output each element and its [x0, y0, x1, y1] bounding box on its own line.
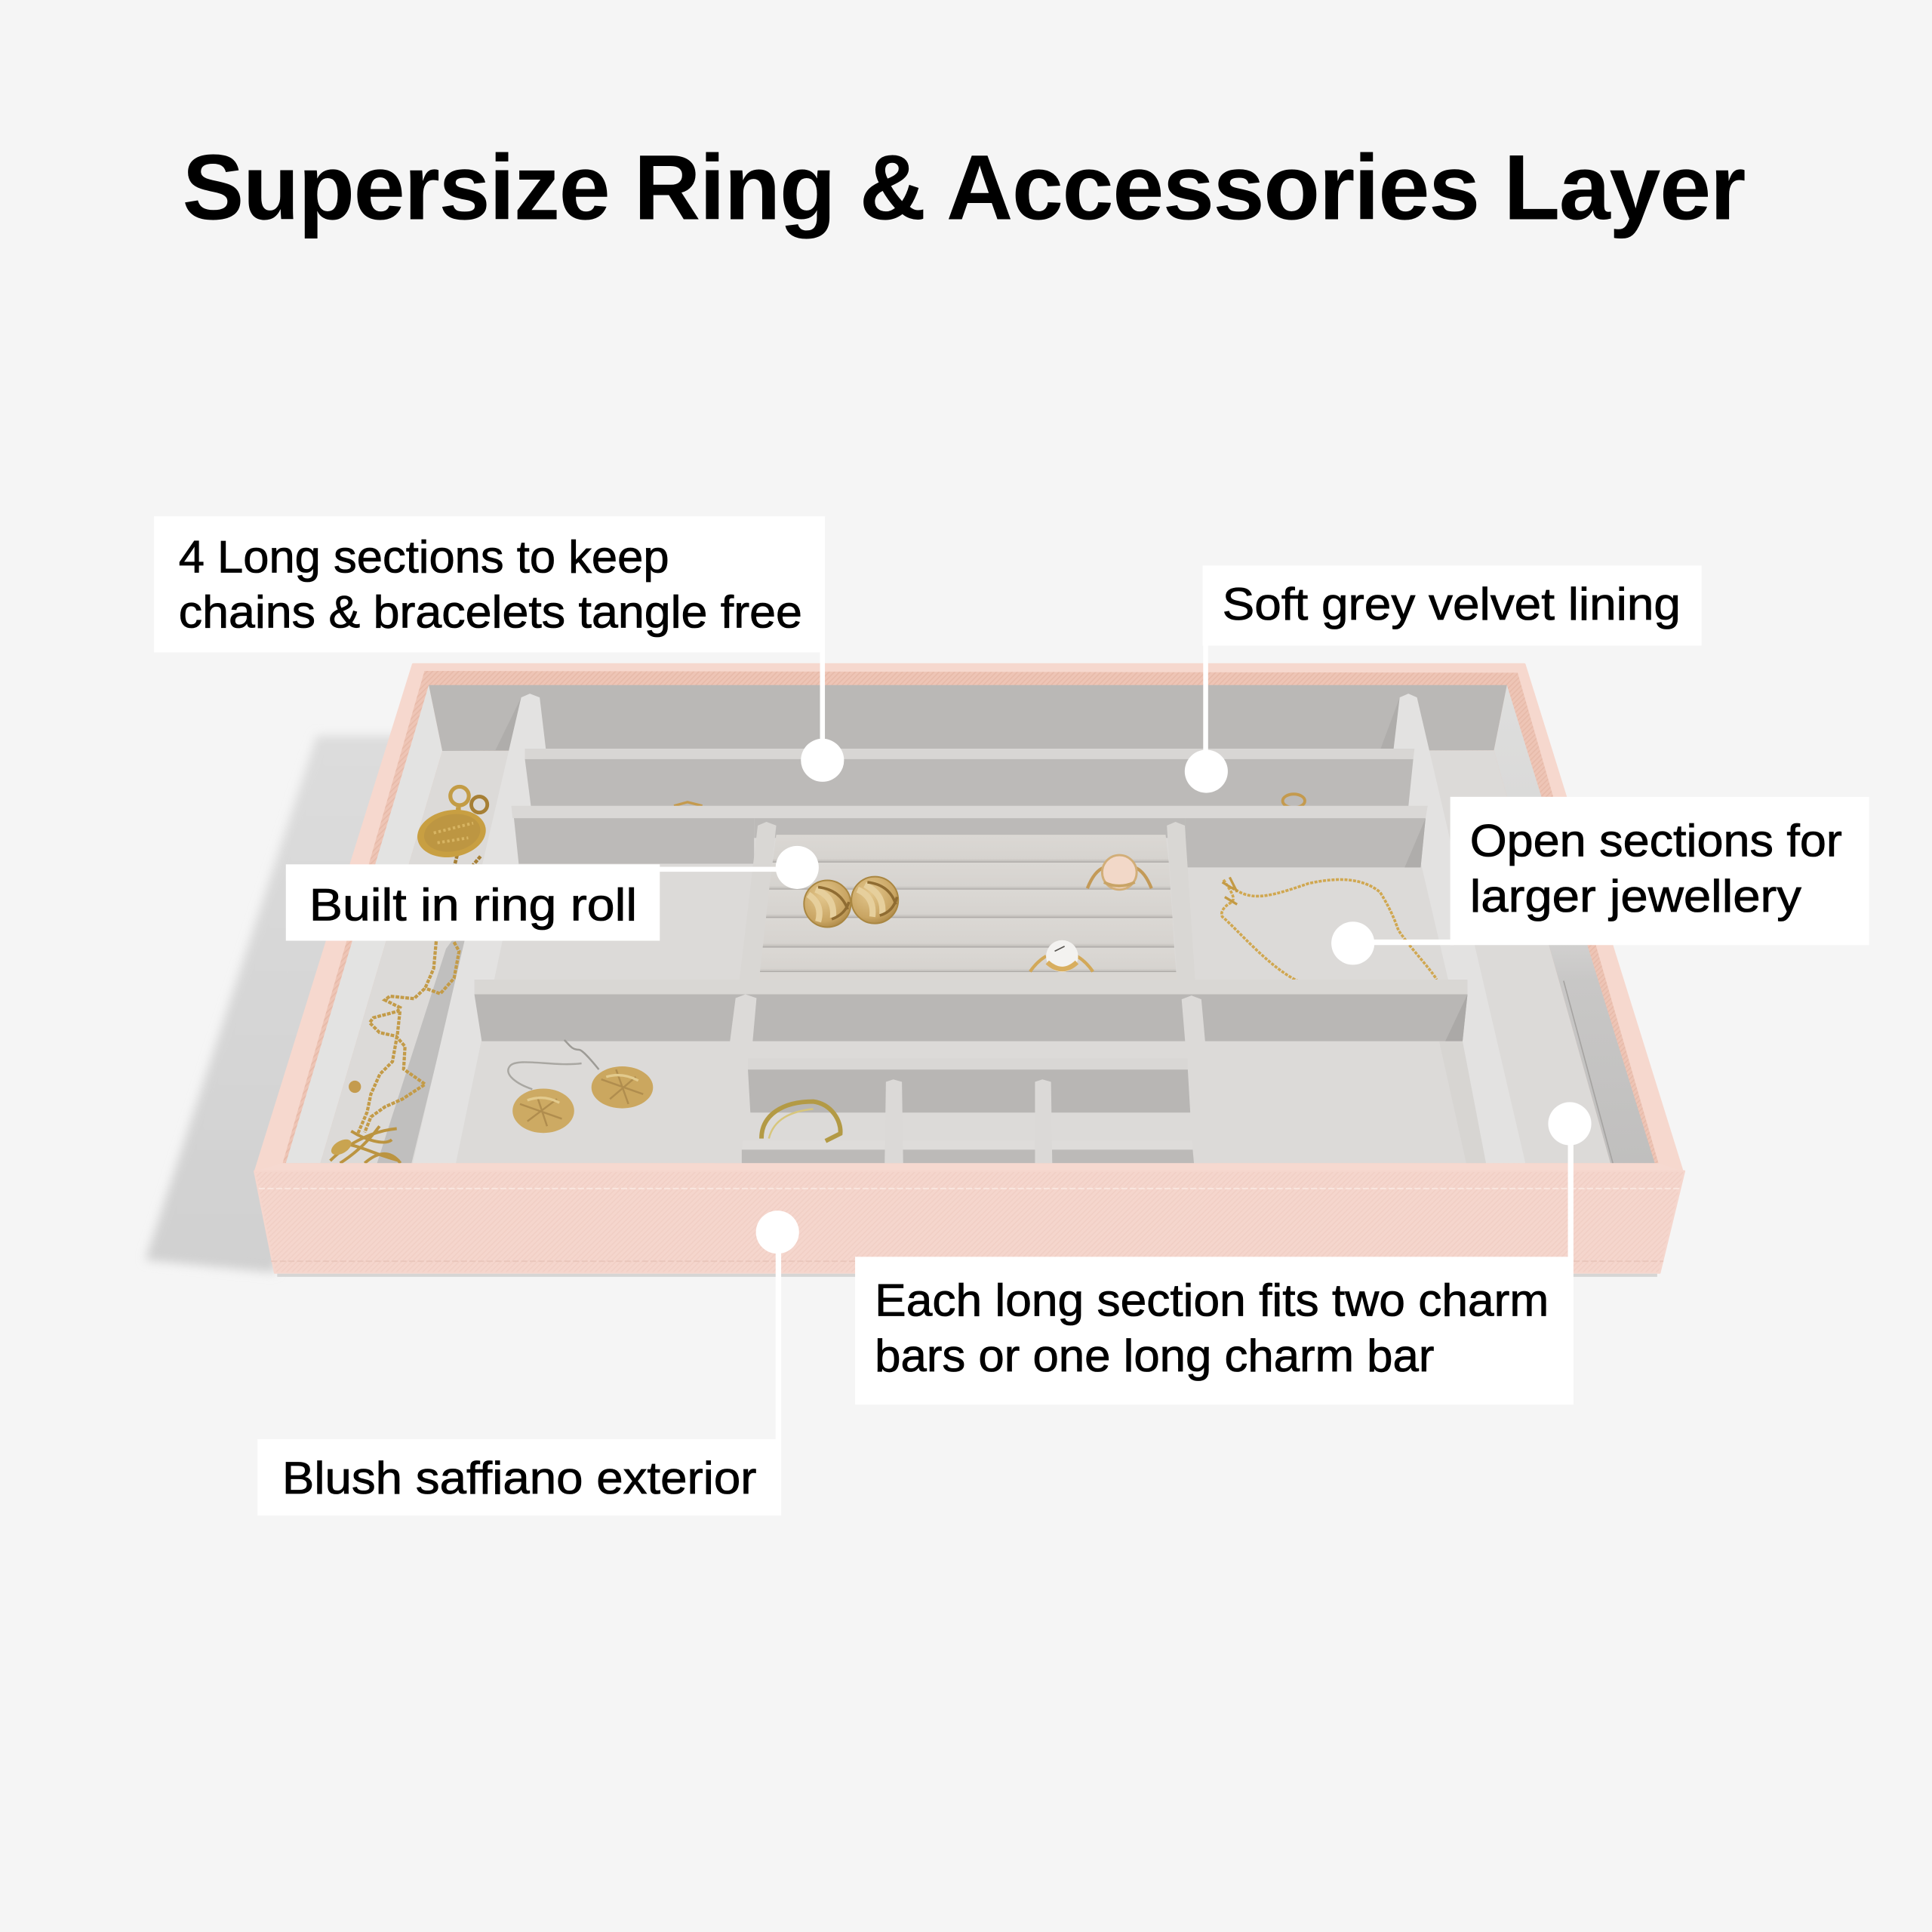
clasp and bead	[328, 1081, 361, 1158]
left inner wall	[286, 685, 442, 1163]
long section divider 3	[475, 980, 1467, 1041]
gold necklace right	[1222, 877, 1437, 981]
callout: ring roll: Built in ring roll	[309, 879, 637, 931]
centre left upright	[740, 822, 777, 981]
knot earrings	[804, 877, 898, 928]
chain bundle	[331, 1126, 401, 1163]
pink outer rim	[256, 665, 1682, 1171]
callout: open sections: Open sections for	[1470, 815, 1842, 866]
jewellery tray	[146, 665, 1684, 1275]
chain gold links	[357, 941, 459, 1135]
callout: charm bars	[855, 1102, 1592, 1404]
callout: long sections	[154, 516, 844, 782]
callout: ring roll	[286, 846, 819, 941]
small sections front lip	[742, 1141, 1194, 1163]
title: Supersize Ring & Accessories Layer	[183, 136, 1746, 239]
left knot	[804, 881, 851, 928]
callout: long sections: chains & bracelets tangle free	[179, 586, 802, 638]
right wall dark seam	[1564, 981, 1613, 1163]
callout: blush exterior	[257, 1211, 799, 1515]
chain to coin pendant	[454, 855, 481, 865]
rose stone ring	[1088, 855, 1152, 890]
long section divider 2	[512, 806, 1428, 867]
coin pendant	[414, 786, 490, 863]
lower right upright	[1182, 995, 1216, 1163]
callout: charm bars: bars or one long charm bar	[875, 1330, 1434, 1381]
coin earrings	[508, 1040, 653, 1133]
front top edge	[254, 1163, 1683, 1171]
built in ring roll	[758, 835, 1178, 981]
callout: blush exterior: Blush saffiano exterior	[282, 1452, 756, 1503]
lower left upright	[714, 995, 756, 1163]
callout: velvet lining: Soft grey velvet lining	[1223, 578, 1681, 629]
back wall right end shading	[1380, 697, 1400, 750]
pink inner rim	[283, 671, 1659, 1163]
gold chain left	[331, 941, 459, 1163]
left long divider	[413, 694, 546, 1163]
small chain piece	[674, 802, 703, 806]
right long divider	[1394, 694, 1525, 1163]
toggle clasp	[1264, 794, 1327, 808]
callout: open sections	[1331, 797, 1869, 964]
front bottom shadow	[277, 1275, 1657, 1276]
lower stitching	[271, 1260, 1663, 1262]
white stone ring	[1030, 940, 1093, 972]
lower right floor shadow	[1439, 1041, 1486, 1163]
floor	[320, 750, 1611, 1163]
right inner wall	[1494, 685, 1655, 1163]
long section divider 1	[525, 749, 1414, 807]
upper stitching	[259, 1188, 1679, 1189]
small upright 2	[1035, 1079, 1052, 1163]
gold ring	[761, 1102, 841, 1141]
blush front panel	[254, 1171, 1684, 1273]
back wall	[429, 685, 1507, 751]
tray cast shadow	[146, 736, 407, 1273]
centre right upright	[1167, 822, 1195, 981]
small upright 1	[884, 1079, 903, 1163]
callout: long sections: 4 Long sections to keep	[179, 531, 669, 582]
small sections divider	[748, 1058, 1190, 1112]
left section floor shadow	[377, 912, 473, 1163]
callout: velvet lining	[1185, 565, 1702, 793]
callout: open sections: larger jewellery	[1470, 870, 1802, 921]
callout: charm bars: Each long section fits two charm	[875, 1275, 1549, 1326]
right knot	[851, 877, 898, 924]
back wall end shading	[495, 697, 521, 750]
